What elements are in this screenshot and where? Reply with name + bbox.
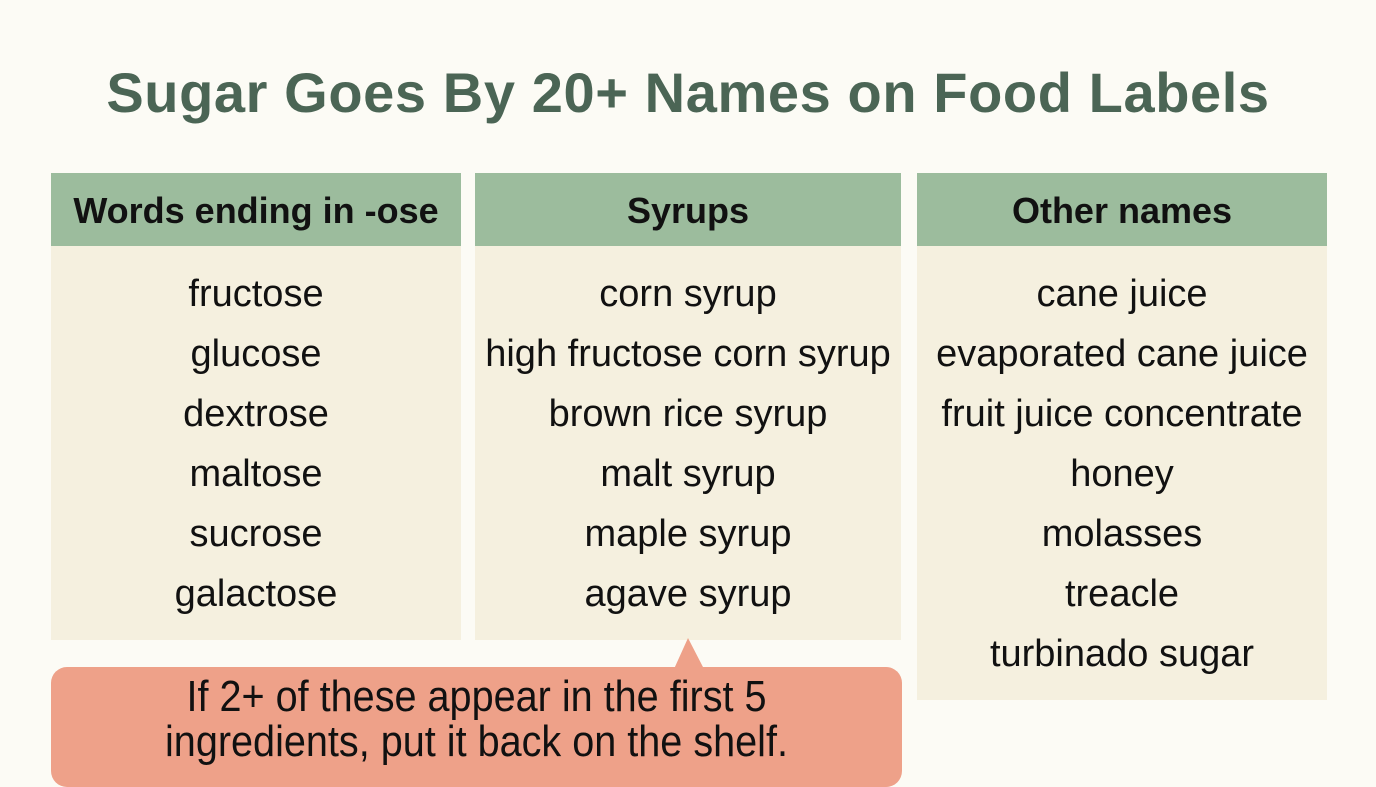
header: syrups [475, 173, 901, 246]
header: ose: Words ending in -ose [73, 190, 439, 231]
callout box [51, 667, 902, 787]
list: ose: dextrose [183, 393, 329, 435]
header: other: Other names [1012, 190, 1232, 231]
list: ose: maltose [189, 453, 323, 495]
list: other: honey [1070, 453, 1174, 495]
list: syrups: corn syrup [599, 273, 777, 315]
list: syrups [475, 246, 901, 640]
list: syrups: maple syrup [584, 513, 791, 555]
callout text [165, 672, 788, 766]
list: ose [51, 246, 461, 640]
list: syrups: high fructose corn syrup [485, 333, 891, 375]
list: syrups: malt syrup [600, 453, 776, 495]
callout text: ingredients, put it back on the shelf. [165, 717, 788, 766]
panel: words ending in -ose [51, 173, 461, 640]
list: other: turbinado sugar [990, 633, 1254, 675]
list: ose: glucose [190, 333, 321, 375]
header: syrups: Syrups [627, 190, 749, 231]
list: other: treacle [1065, 573, 1179, 615]
title: Sugar Goes By 20+ Names on Food Labels [106, 61, 1270, 124]
list: other [917, 246, 1327, 700]
list: other: evaporated cane juice [936, 333, 1308, 375]
panel: syrups [475, 173, 901, 640]
list: syrups: agave syrup [584, 573, 792, 615]
callout text: If 2+ of these appear in the first 5 [186, 672, 767, 721]
panel: other names [917, 173, 1327, 700]
header: other [917, 173, 1327, 246]
list: ose: galactose [175, 573, 337, 615]
list: other: cane juice [1036, 273, 1208, 315]
list: ose: fructose [188, 273, 324, 315]
list: ose: sucrose [189, 513, 323, 555]
callout pointer [675, 638, 703, 667]
list: other: fruit juice concentrate [941, 393, 1303, 435]
header: ose [51, 173, 461, 246]
list: syrups: brown rice syrup [549, 393, 827, 435]
list: other: molasses [1042, 513, 1202, 555]
